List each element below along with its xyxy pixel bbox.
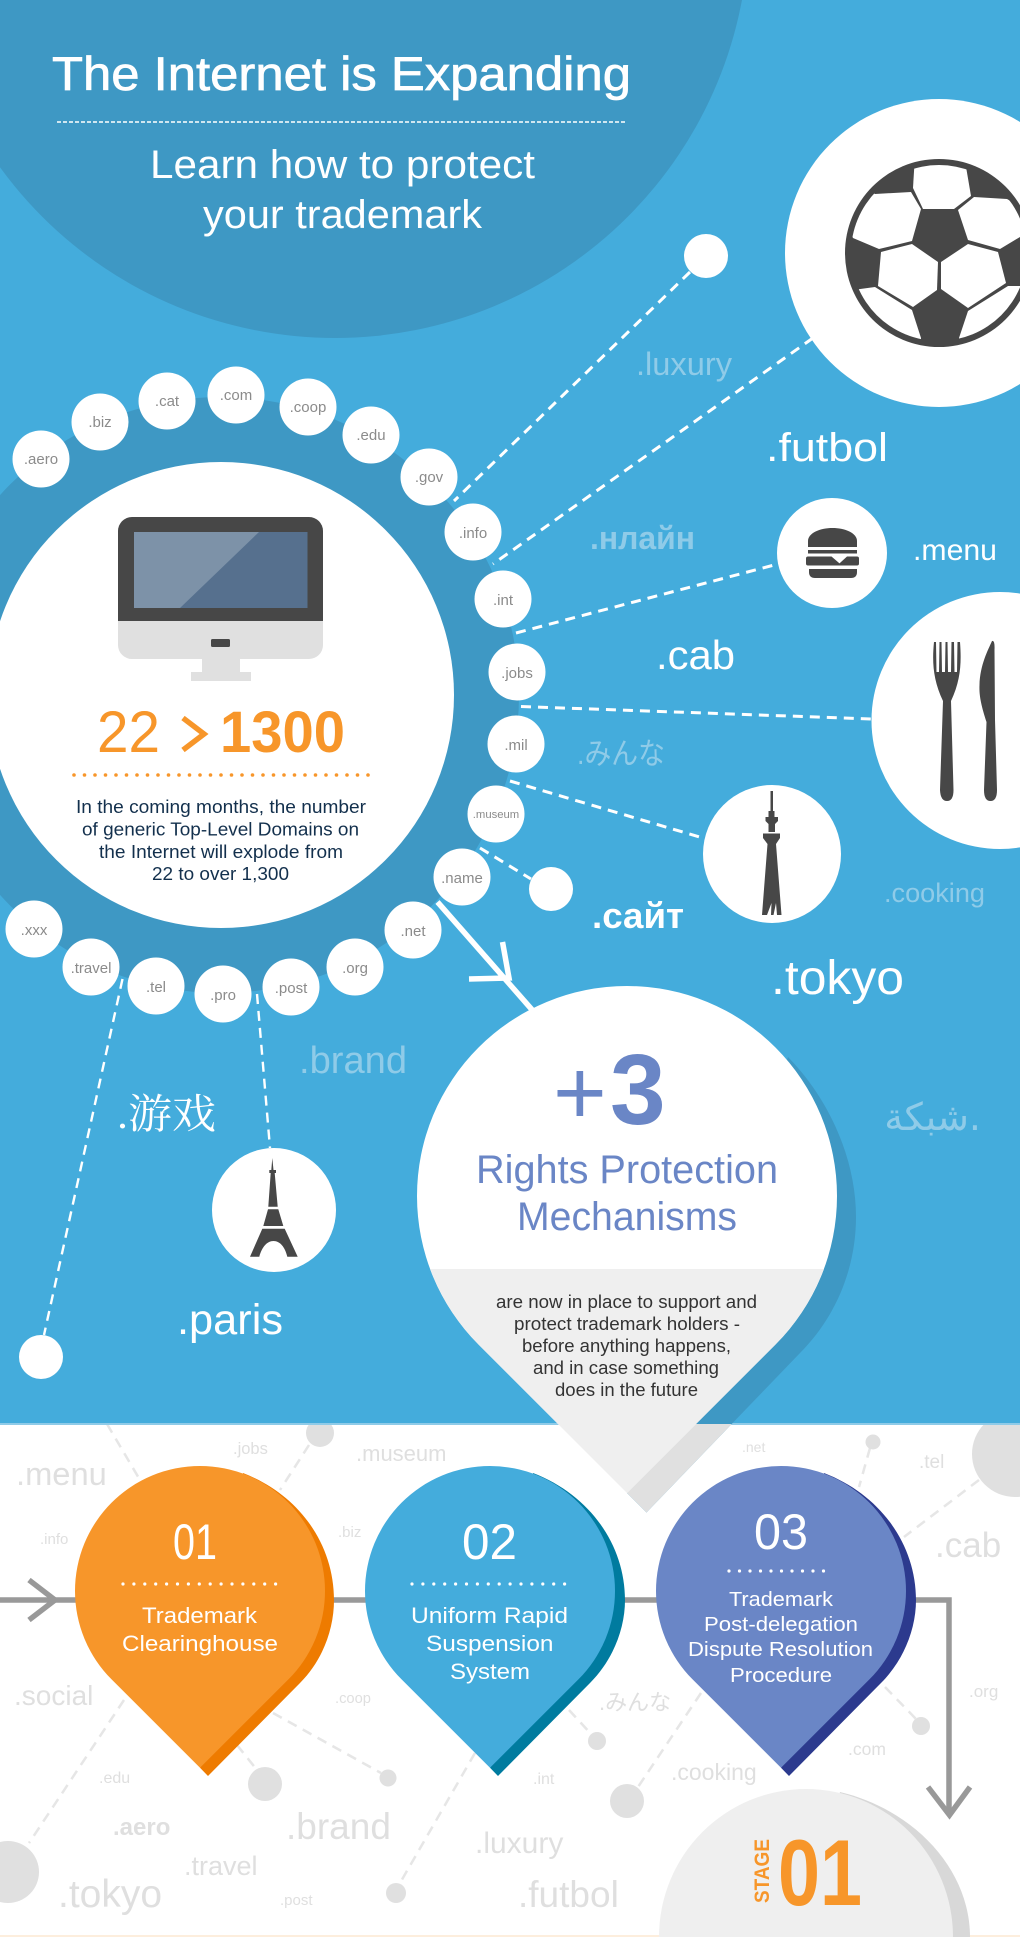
description: 22 to over 1,300 xyxy=(152,864,289,884)
main white circle xyxy=(0,462,454,928)
title: The Internet is Expanding xyxy=(52,47,631,100)
domain circles ring: .coop xyxy=(290,399,326,416)
faint domain name background: .int xyxy=(533,1771,555,1788)
faint domain name background: .tel xyxy=(919,1452,944,1473)
orange dotted divider xyxy=(74,773,369,777)
faint domain name background: .jobs xyxy=(233,1440,268,1458)
plus three: + xyxy=(553,1042,607,1144)
faint domain name background: .edu xyxy=(99,1770,130,1787)
dot: bottom left xyxy=(19,1335,63,1379)
process flow arrow line xyxy=(0,1580,970,1815)
pin 01 trademark clearinghouse: Clearinghouse xyxy=(122,1631,278,1656)
domain circles ring: .edu xyxy=(356,427,386,444)
pin heading: Rights Protection xyxy=(476,1148,778,1192)
stat: 22 to 1300 xyxy=(97,700,345,765)
subtitle: your trademark xyxy=(203,193,483,237)
pin body text: does in the future xyxy=(555,1380,698,1400)
stage label: 01 xyxy=(778,1820,862,1925)
domain labels: .tokyo xyxy=(771,952,904,1005)
stage dome xyxy=(659,1789,970,1937)
domain labels: .cooking xyxy=(884,878,985,908)
pin 03 post-delegation dispute resolution xyxy=(656,1466,916,1776)
domain labels: .futbol xyxy=(766,426,888,470)
domain circles ring: .int xyxy=(493,592,514,609)
domain circles ring: .name xyxy=(441,870,483,887)
domain labels: .paris xyxy=(177,1296,283,1344)
stage label: STAGE xyxy=(751,1839,774,1903)
pin body text: are now in place to support and xyxy=(496,1292,757,1312)
pin 02 uniform rapid suspension: Uniform Rapid xyxy=(411,1603,568,1628)
panel: rights protection pin xyxy=(417,986,856,1512)
pin body text xyxy=(496,1292,757,1400)
domain labels: .нлайн xyxy=(590,520,695,556)
faint domain name background: .cab xyxy=(935,1526,1001,1565)
stat: 22 to 1300: 1300 xyxy=(220,700,345,765)
faint domain name background: .info xyxy=(40,1531,68,1548)
domain circles ring: .info xyxy=(459,525,487,542)
pin 02 uniform rapid suspension: System xyxy=(450,1659,530,1684)
domain labels: .cab xyxy=(656,632,735,678)
domain circles ring: .tel xyxy=(146,979,166,996)
domain labels: .сайт xyxy=(592,895,684,936)
faint domain name background: .みんな xyxy=(599,1690,671,1715)
pin 01 trademark clearinghouse: 01 xyxy=(173,1514,217,1570)
domain labels: .みんな xyxy=(577,738,665,771)
domain circles ring: .pro xyxy=(210,987,236,1004)
domain ring background xyxy=(0,397,519,993)
icon: eiffel tower xyxy=(212,1148,336,1272)
pin 03 post-delegation dispute resolution: Post-delegation xyxy=(704,1613,858,1636)
subtitle xyxy=(150,143,535,237)
faint domain name background: .futbol xyxy=(518,1874,619,1915)
pin 03 post-delegation dispute resolution: Trademark xyxy=(729,1588,834,1611)
subtitle: Learn how to protect xyxy=(150,143,535,187)
domain circles ring: .gov xyxy=(415,469,444,486)
domain circles ring: .net xyxy=(400,923,426,940)
description: In the coming months, the number xyxy=(76,797,366,817)
dot: site xyxy=(529,867,573,911)
domain circles ring: .aero xyxy=(24,451,58,468)
pin 03 post-delegation dispute resolution: Procedure xyxy=(730,1664,832,1687)
icon: burger xyxy=(777,498,887,608)
title circle xyxy=(0,0,749,338)
pin heading xyxy=(476,1148,778,1239)
faint domain name background: .post xyxy=(280,1892,313,1909)
pin body text: before anything happens, xyxy=(522,1336,731,1356)
pin heading: Mechanisms xyxy=(517,1195,737,1239)
faint domain name background: .brand xyxy=(286,1806,391,1847)
faint domain name background: .cooking xyxy=(671,1759,757,1785)
pin body text: and in case something xyxy=(533,1358,719,1378)
blue panel xyxy=(0,0,1020,1424)
plus three xyxy=(553,1034,666,1146)
pin 02 uniform rapid suspension: 02 xyxy=(462,1514,517,1570)
domain circles ring: .mil xyxy=(504,737,528,754)
pin 01 trademark clearinghouse: Trademark xyxy=(142,1603,258,1628)
domain labels xyxy=(117,346,997,1344)
description: of generic Top-Level Domains on xyxy=(82,820,359,840)
faint domain name background: .org xyxy=(969,1682,998,1701)
pin body text: protect trademark holders - xyxy=(514,1314,740,1334)
description xyxy=(76,797,366,884)
faint domain name background: .biz xyxy=(338,1524,361,1541)
faint domain name background: .coop xyxy=(335,1691,371,1707)
domain labels: .شبكة xyxy=(884,1095,981,1139)
domain labels: .luxury xyxy=(636,346,732,382)
domain circles ring: .jobs xyxy=(501,665,533,682)
pin 02 uniform rapid suspension xyxy=(365,1466,625,1776)
pin 03 post-delegation dispute resolution: Dispute Resolution xyxy=(688,1638,873,1661)
icon: computer monitor xyxy=(118,517,323,681)
domain circles ring: .post xyxy=(275,980,308,997)
domain circles ring: .cat xyxy=(155,393,180,410)
faint domain name background: .museum xyxy=(356,1441,446,1466)
domain labels: .menu xyxy=(913,534,997,567)
pin 03 post-delegation dispute resolution: 03 xyxy=(754,1504,808,1560)
faint domain name background: .aero xyxy=(113,1814,170,1841)
domain circles ring: .org xyxy=(342,960,368,977)
domain labels: .游戏 xyxy=(117,1091,216,1137)
faint domain name background: .social xyxy=(14,1680,93,1711)
stat: 22 to 1300: 22 xyxy=(97,700,160,765)
faint domain name background: .tokyo xyxy=(58,1873,162,1916)
faint domain name background: .luxury xyxy=(475,1827,563,1860)
icon: soccer ball xyxy=(785,99,1020,407)
pin 02 uniform rapid suspension: Suspension xyxy=(426,1631,554,1656)
title divider xyxy=(57,121,626,123)
arrow to rights protection xyxy=(438,902,534,1012)
icon: fork and knife xyxy=(872,592,1020,849)
domain circles ring: .xxx xyxy=(21,922,48,939)
bottom edge xyxy=(0,1935,1020,1937)
domain circles ring: .museum xyxy=(473,809,519,821)
plus three: 3 xyxy=(610,1034,666,1146)
stage label xyxy=(751,1820,862,1925)
faint domain name background: .com xyxy=(848,1739,886,1759)
domain labels: .brand xyxy=(299,1040,407,1082)
faint domain name background xyxy=(0,1411,1020,1916)
faint domain name background: .travel xyxy=(184,1851,258,1881)
faint domain name background: .net xyxy=(742,1439,765,1455)
faint domain name background: .menu xyxy=(16,1455,107,1492)
description: the Internet will explode from xyxy=(99,842,343,862)
panel edge xyxy=(0,1423,1020,1425)
dot: luxury xyxy=(684,234,728,278)
domain circles ring: .travel xyxy=(71,960,111,977)
icon: tokyo skytree xyxy=(703,785,841,923)
domain circles ring: .com xyxy=(220,387,252,404)
pin 01 trademark clearinghouse xyxy=(75,1466,334,1776)
domain circles ring: .biz xyxy=(88,414,112,431)
domain circles ring xyxy=(6,366,546,1022)
connector dashed lines xyxy=(44,272,872,1335)
